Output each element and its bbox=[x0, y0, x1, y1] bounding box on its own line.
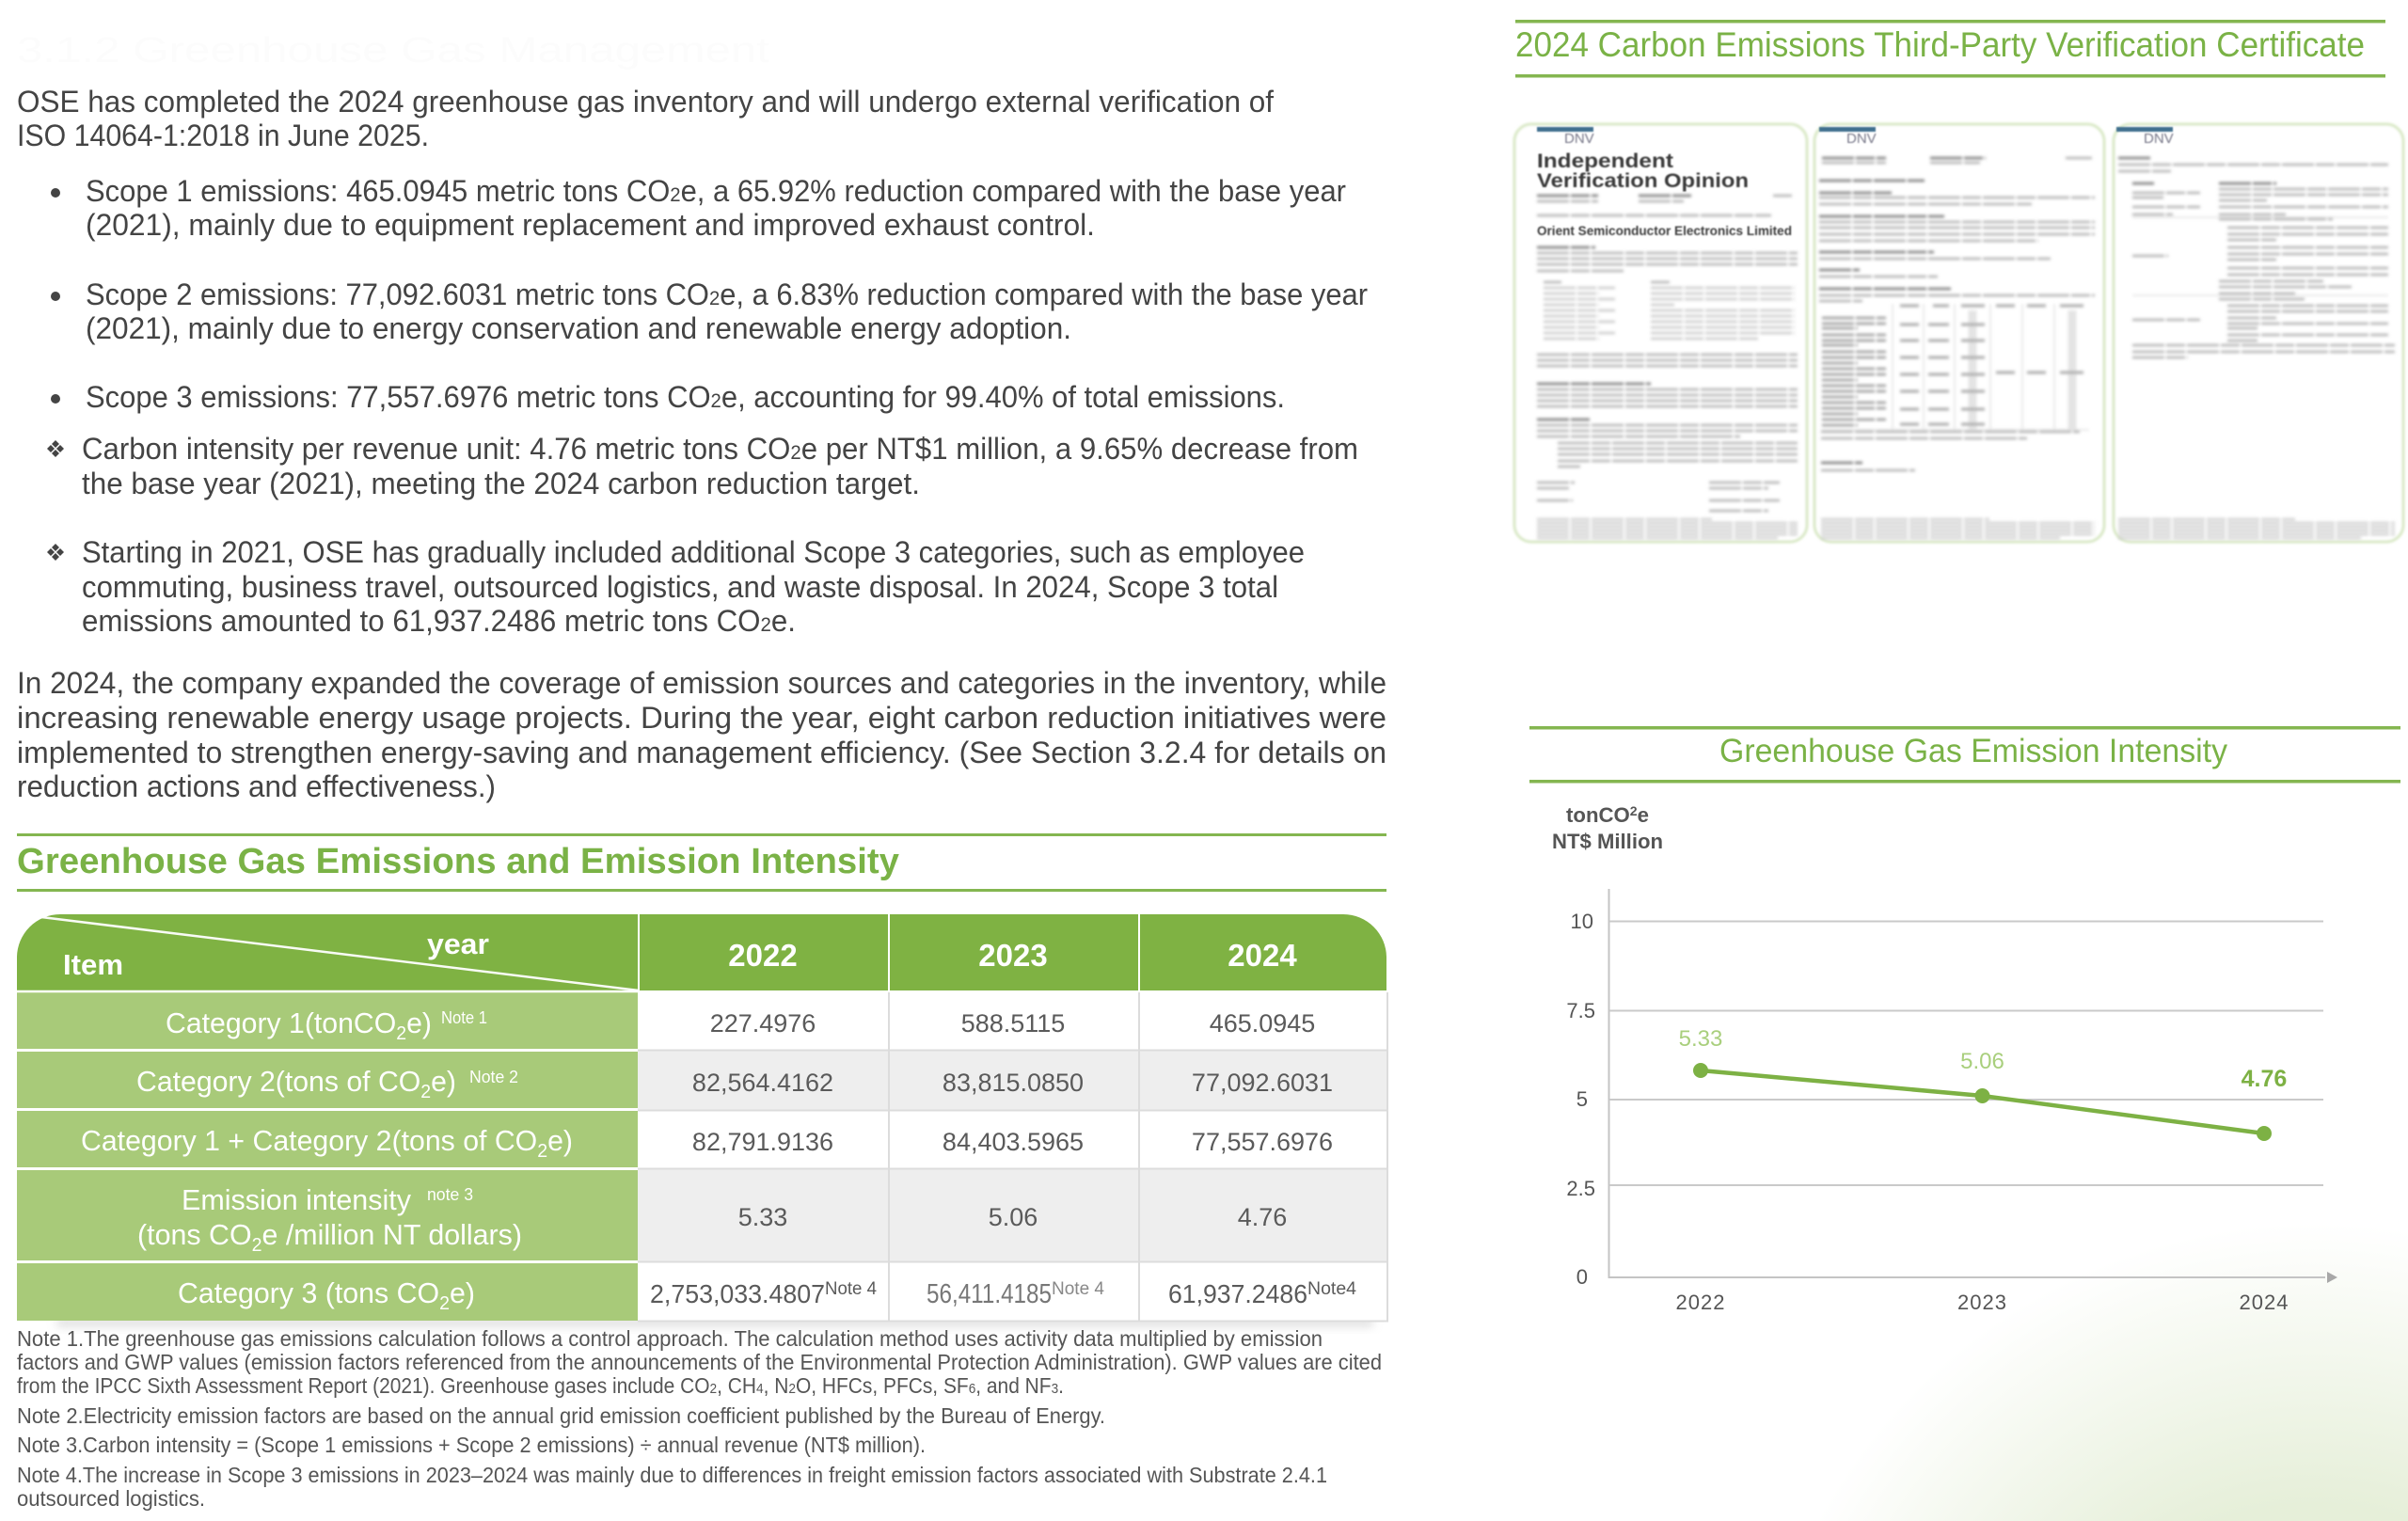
footnotes: outsourced logistics. bbox=[17, 1486, 205, 1511]
row: category 1 bbox=[166, 1006, 1315, 1044]
row: category 1: 227.4976 bbox=[710, 1009, 816, 1038]
bullet: scope 2 bbox=[51, 277, 1368, 345]
data labels: 5.33 bbox=[1679, 1026, 1722, 1052]
bullet: carbon intensity bbox=[47, 432, 1358, 500]
bullet: scope 1: Scope 1 emissions: 465.0945 metric tons CO2e, a 65.92% reduction compared with the base year bbox=[86, 174, 1346, 208]
data labels: 5.06 bbox=[1960, 1049, 2004, 1074]
bullet: scope 2: (2021), mainly due to energy conservation and renewable energy adoption. bbox=[86, 311, 1071, 345]
y axis labels: 7.5 bbox=[1566, 999, 1595, 1022]
table heading: Greenhouse Gas Emissions and Emission Intensity bbox=[17, 842, 899, 881]
row: category 2: 2 bbox=[420, 1082, 431, 1102]
bullet: scope 3: Scope 3 emissions: 77,557.6976 metric tons CO2e, accounting for 99.40% of total emissions. bbox=[86, 380, 1285, 414]
x axis labels: 2024 bbox=[2240, 1291, 2289, 1314]
bullet: carbon intensity: the base year (2021), meeting the 2024 carbon reduction target. bbox=[82, 467, 920, 500]
row: category 2: 77,092.6031 bbox=[1192, 1069, 1333, 1097]
row: category 1: 588.5115 bbox=[961, 1009, 1065, 1038]
DNV logo: DNV bbox=[1564, 131, 1594, 147]
table header: 2022 bbox=[728, 938, 798, 973]
closing paragraph: increasing renewable energy usage projects. During the year, eight carbon reduction initiatives were bbox=[17, 701, 1386, 735]
row: category 3: 61,937.2486 bbox=[1168, 1279, 1307, 1308]
row: emission intensity: (tons CO bbox=[137, 1218, 254, 1251]
x axis labels bbox=[1676, 1291, 2289, 1314]
row: emission intensity: 5.06 bbox=[989, 1203, 1038, 1231]
table header: 2024 bbox=[1228, 938, 1297, 973]
intro paragraph: ISO 14064-1:2018 in June 2025. bbox=[17, 119, 429, 152]
footnotes: Note 1.The greenhouse gas emissions calculation follows a control approach. The calculation method uses activity data multiplied by emission bbox=[17, 1326, 1323, 1351]
bullet: scope 3 categories: Starting in 2021, OSE has gradually included additional Scope 3 categories, such as employee bbox=[82, 535, 1305, 569]
row: category 3: e) bbox=[450, 1276, 475, 1309]
table header: 2023 bbox=[978, 938, 1048, 973]
row: category 1 + 2: 77,557.6976 bbox=[1192, 1128, 1333, 1156]
emissions table bbox=[17, 914, 1388, 1326]
certificate title bbox=[1537, 151, 1792, 238]
chart heading: Greenhouse Gas Emission Intensity bbox=[1719, 733, 2227, 769]
data series bbox=[1693, 1063, 2272, 1141]
chart unit label: tonCO bbox=[1566, 803, 1629, 827]
closing paragraph: reduction actions and effectiveness.) bbox=[17, 769, 496, 803]
background glow bottom right bbox=[1693, 1223, 2408, 1521]
row separators bbox=[17, 991, 638, 1262]
x axis labels: 2023 bbox=[1957, 1291, 2007, 1314]
certificate heading: 2024 Carbon Emissions Third-Party Verification Certificate bbox=[1515, 25, 2365, 64]
table header: year bbox=[427, 927, 489, 960]
row: emission intensity: Emission intensity bbox=[182, 1183, 411, 1216]
bullet: carbon intensity: Carbon intensity per revenue unit: 4.76 metric tons CO2e per NT$1 million, a 9.65% decrease from bbox=[82, 432, 1358, 466]
row: category 2: Note 2 bbox=[469, 1068, 518, 1086]
row: category 1 + 2: e) bbox=[547, 1124, 573, 1157]
table header bbox=[17, 914, 1386, 991]
certificate title: Orient Semiconductor Electronics Limited bbox=[1537, 223, 1792, 238]
line chart bbox=[1566, 889, 2337, 1314]
footnotes: Note 2.Electricity emission factors are based on the annual grid emission coefficient published by the Bureau of Energy. bbox=[17, 1403, 1105, 1428]
closing paragraph: In 2024, the company expanded the coverage of emission sources and categories in the inventory, while bbox=[17, 666, 1386, 700]
certificate body lines bbox=[1537, 196, 1798, 538]
certificate page 3 bbox=[2114, 124, 2403, 542]
row: emission intensity: 2 bbox=[252, 1235, 262, 1256]
bullet: scope 1: (2021), mainly due to equipment replacement and improved exhaust control. bbox=[86, 208, 1095, 242]
chart unit label: e bbox=[1638, 803, 1649, 827]
data labels bbox=[1679, 1026, 2287, 1092]
certificate page 2 bbox=[1814, 124, 2104, 542]
row: category 2: 82,564.4162 bbox=[692, 1069, 833, 1097]
intro paragraph: OSE has completed the 2024 greenhouse gas inventory and will undergo external verification of bbox=[17, 85, 1274, 119]
chart heading bbox=[1529, 726, 2400, 783]
y axis labels bbox=[1566, 910, 1595, 1289]
row: category 1: 2 bbox=[396, 1023, 406, 1044]
footnotes bbox=[17, 1326, 1382, 1511]
row: category 3: Note 4 bbox=[1052, 1279, 1104, 1299]
certificate title: Verification Opinion bbox=[1537, 170, 1749, 192]
y axis labels: 0 bbox=[1576, 1265, 1588, 1289]
row: category 3: 2 bbox=[439, 1293, 450, 1314]
footnotes: Note 3.Carbon intensity = (Scope 1 emissions + Scope 2 emissions) ÷ annual revenue (NT$ million). bbox=[17, 1433, 926, 1457]
bullet: scope 3 categories bbox=[47, 535, 1305, 638]
certificate body lines bbox=[2118, 158, 2395, 538]
bullet: scope 3 categories: commuting, business travel, outsourced logistics, and waste disposal. In 2024, Scope 3 total bbox=[82, 570, 1278, 604]
table header: Item bbox=[63, 948, 123, 981]
row: category 3 bbox=[178, 1276, 1356, 1314]
row: category 3: Note 4 bbox=[825, 1279, 877, 1299]
row: category 1: Note 1 bbox=[441, 1008, 487, 1027]
axes and grid bbox=[1608, 889, 2337, 1283]
chart unit label: NT$ Million bbox=[1552, 830, 1663, 853]
row: category 1 + 2: Category 1 + Category 2(tons of CO bbox=[81, 1124, 548, 1157]
row: category 3: 56,411.4185 bbox=[927, 1279, 1052, 1309]
footnotes: Note 4.The increase in Scope 3 emissions in 2023–2024 was mainly due to differences in freight emission factors associated with Substrate 2.4.1 bbox=[17, 1463, 1327, 1487]
x axis labels: 2022 bbox=[1676, 1291, 1725, 1314]
bullet: scope 2: Scope 2 emissions: 77,092.6031 metric tons CO2e, a 6.83% reduction compared with the base year bbox=[86, 277, 1368, 311]
DNV logo bbox=[1537, 127, 1594, 147]
row: category 1: 465.0945 bbox=[1210, 1009, 1315, 1038]
row: emission intensity: 4.76 bbox=[1238, 1203, 1287, 1231]
footnotes: from the IPCC Sixth Assessment Report (2021). Greenhouse gases include CO2, CH4, N2O, HFCs, PFCs, SF6, and NF3. bbox=[17, 1373, 1064, 1398]
row labels background bbox=[17, 992, 638, 1321]
footnotes: factors and GWP values (emission factors referenced from the announcements of the Environmental Protection Administration). GWP values are cited bbox=[17, 1350, 1382, 1374]
row: category 1 + 2: 84,403.5965 bbox=[943, 1128, 1084, 1156]
y axis labels: 10 bbox=[1571, 910, 1593, 933]
data labels: 4.76 bbox=[2242, 1066, 2287, 1092]
row: category 3: Note4 bbox=[1307, 1279, 1356, 1299]
chart unit label: 2 bbox=[1630, 803, 1638, 818]
row: emission intensity: note 3 bbox=[427, 1185, 473, 1204]
certificate body lines bbox=[1819, 158, 2095, 538]
closing paragraph bbox=[17, 666, 1386, 803]
value cell shading bbox=[638, 992, 1388, 1322]
certificate heading bbox=[1515, 20, 2385, 77]
DNV logo: DNV bbox=[1846, 131, 1877, 147]
row: emission intensity: e /million NT dollars) bbox=[262, 1218, 522, 1251]
row: emission intensity bbox=[137, 1183, 1287, 1256]
certificate page 1 bbox=[1514, 124, 1807, 542]
row: emission intensity: 5.33 bbox=[738, 1203, 787, 1231]
closing paragraph: implemented to strengthen energy-saving and management efficiency. (See Section 3.2.4 for details on bbox=[17, 736, 1386, 769]
row: category 2: 83,815.0850 bbox=[943, 1069, 1084, 1097]
row: category 1: e) bbox=[406, 1006, 432, 1039]
bullet: scope 1 bbox=[51, 174, 1346, 242]
y axis labels: 5 bbox=[1576, 1087, 1588, 1111]
DNV logo bbox=[2116, 127, 2174, 147]
table heading bbox=[17, 833, 1386, 892]
row: category 3: 2,753,033.4807 bbox=[650, 1279, 825, 1308]
row: category 1 + 2 bbox=[81, 1124, 1333, 1162]
intro paragraph bbox=[17, 85, 1274, 152]
row: category 1: Category 1(tonCO bbox=[166, 1006, 403, 1039]
row: category 1 + 2: 2 bbox=[537, 1141, 547, 1162]
row: category 3: Category 3 (tons CO bbox=[178, 1276, 445, 1309]
chart unit label bbox=[1552, 803, 1663, 853]
certificate title: Independent bbox=[1537, 151, 1673, 172]
DNV logo bbox=[1819, 127, 1877, 147]
faded section heading: 3.1.2 Greenhouse Gas Management bbox=[17, 31, 770, 71]
table shadow bbox=[56, 1319, 1373, 1326]
row: category 2: e) bbox=[431, 1065, 456, 1098]
bullet: scope 3 categories: emissions amounted to 61,937.2486 metric tons CO2e. bbox=[82, 604, 796, 638]
row: category 1 + 2: 82,791.9136 bbox=[692, 1128, 833, 1156]
DNV logo: DNV bbox=[2144, 131, 2174, 147]
y axis labels: 2.5 bbox=[1566, 1177, 1595, 1200]
row: category 2: Category 2(tons of CO bbox=[136, 1065, 428, 1098]
row: category 2 bbox=[136, 1065, 1333, 1102]
